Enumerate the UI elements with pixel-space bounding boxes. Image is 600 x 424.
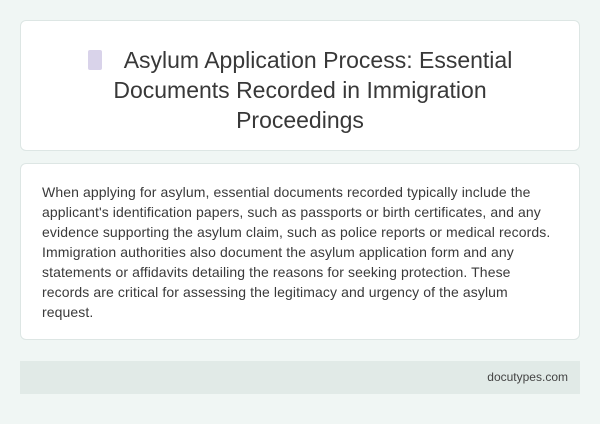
- title: Asylum Application Process: Essential Documents Recorded in Immigration Proceedings: [113, 47, 512, 133]
- footer: docutypes.com: [487, 370, 568, 384]
- text block: When applying for asylum, essential documents recorded typically include the applicant's identification papers, such as passports or birth certificates, and any evidence supporting the asylum claim, such as police reports or medical records. Immigration authorities also document the asylum application form and any statements or affidavits detailing the reasons for seeking protection. These records are critical for assessing the legitimacy and urgency of the asylum request.: [42, 184, 550, 320]
- panel: description: [20, 163, 580, 340]
- panel: title card: [20, 20, 580, 151]
- footer: [20, 361, 580, 394]
- icon: document: [88, 50, 102, 70]
